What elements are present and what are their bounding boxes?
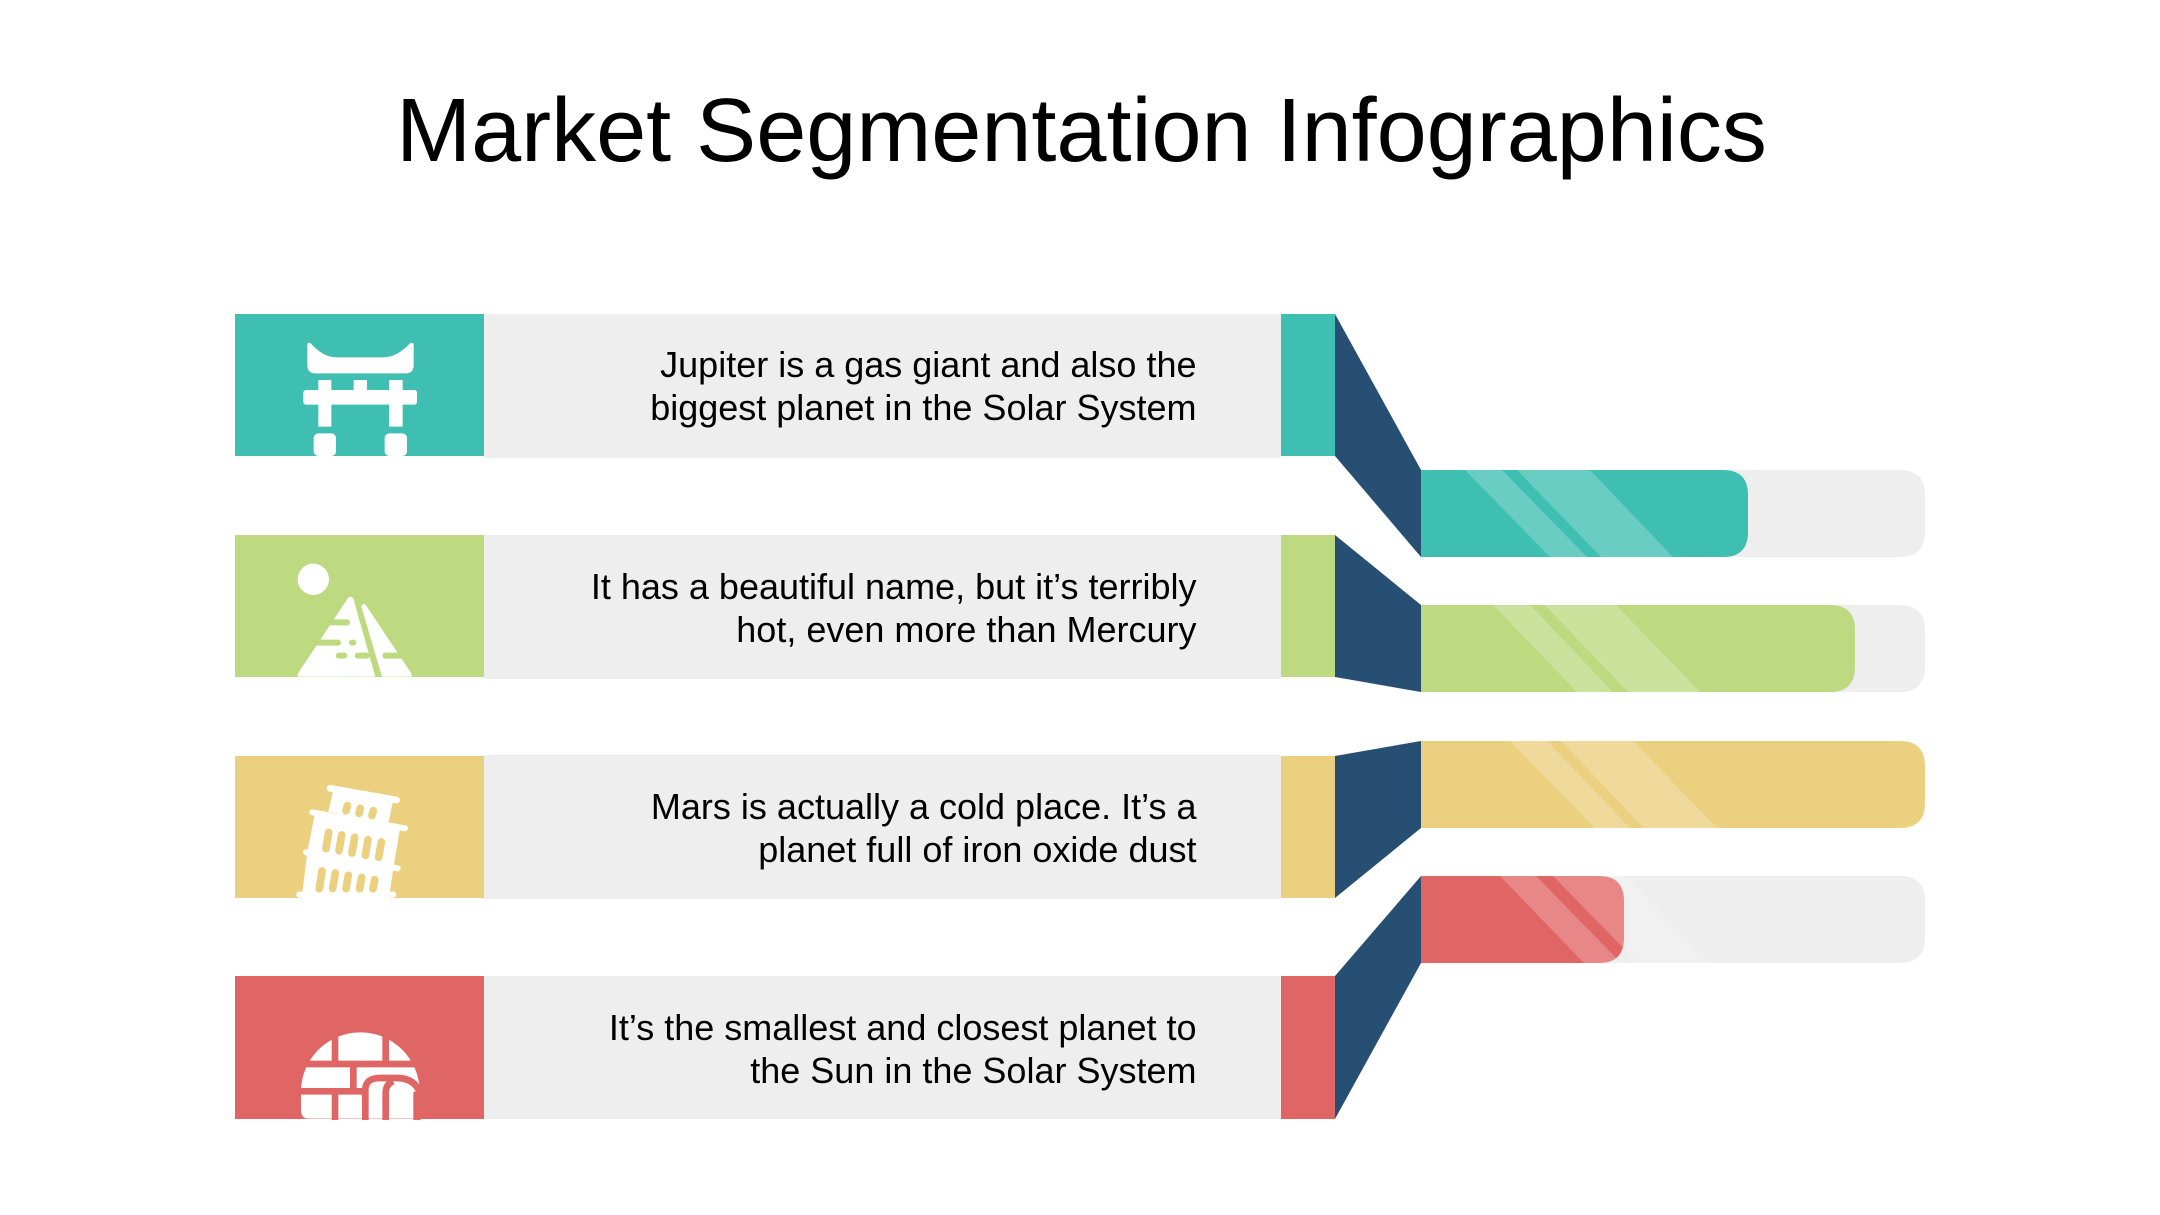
icon: leaning tower [299,788,405,898]
bar 2 [1421,605,1925,692]
title: Market Segmentation Infographics [396,81,1767,181]
text: Mars description [651,786,1197,870]
text: Jupiter description: biggest planet in the Solar System [650,387,1196,428]
text: Venus description [591,566,1196,650]
bar 1 [1421,470,1925,557]
panel: row 1 Jupiter [235,314,1335,458]
text: Mercury description: It’s the smallest and closest planet to [609,1007,1196,1048]
text: Mercury description [609,1007,1196,1091]
bar 3 [1421,741,1925,828]
icon: pyramid and sun [298,564,412,677]
icon: igloo [297,1032,423,1120]
icon: torii gate [303,343,417,456]
bar 4 [1421,876,1925,963]
text: Mercury description: the Sun in the Solar System [750,1050,1196,1091]
panel: row 3 Mars [235,755,1335,899]
connector 1 [1335,314,1421,557]
connector 4 [1335,876,1421,1119]
panel: row 2 Venus [235,535,1335,679]
text: Mars description: Mars is actually a cold place. It’s a [651,786,1197,827]
text: Jupiter description: Jupiter is a gas giant and also the [660,344,1196,385]
connector 2 [1335,535,1421,692]
text: Venus description: hot, even more than Mercury [736,609,1196,650]
panel: row 4 Mercury [235,976,1335,1120]
text: Mars description: planet full of iron oxide dust [758,829,1196,870]
text: Jupiter description [650,344,1196,428]
connector 3 [1335,741,1421,898]
text: Venus description: It has a beautiful name, but it’s terribly [591,566,1196,607]
